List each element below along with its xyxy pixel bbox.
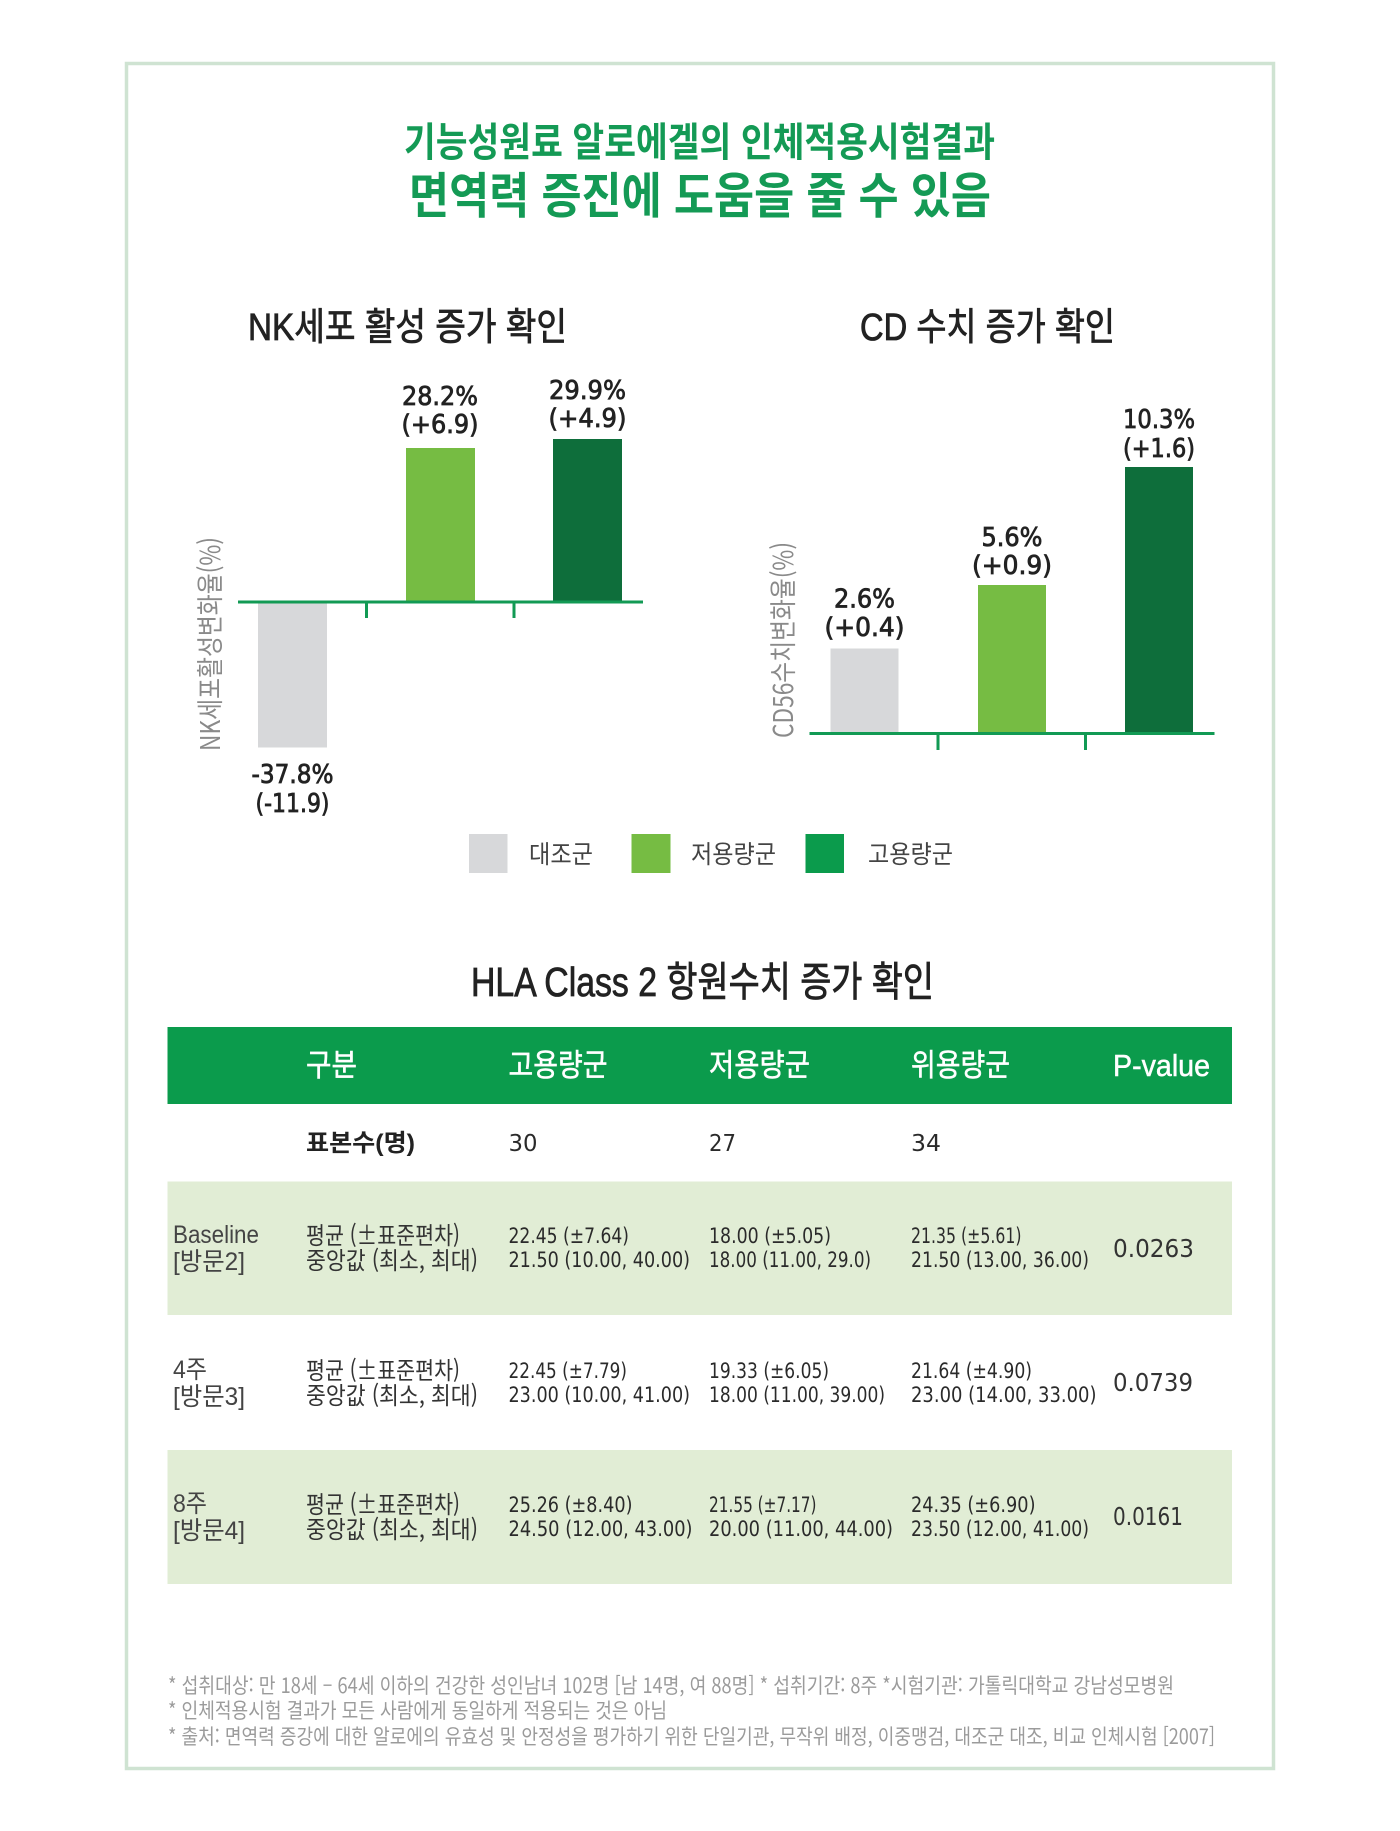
value: control: (-11.9) (256, 789, 330, 819)
title line 1: 기능성원료 알로에겔의 인체적용시험결과 (404, 121, 995, 165)
table header: P-value (1113, 1048, 1210, 1083)
value: low dose (972, 523, 1052, 581)
legend label: low dose: 저용량군 (691, 835, 776, 871)
bar: low dose (978, 585, 1046, 734)
panel frame (126, 64, 1274, 1768)
table row: week 4: 0.0739 (1113, 1368, 1193, 1397)
legend swatch: high dose (806, 834, 844, 873)
table row: sample size (306, 1130, 941, 1157)
table row: week 4: 23.00 (10.00, 41.00) (508, 1383, 690, 1407)
table row: baseline: 22.45 (±7.64) (508, 1224, 629, 1248)
value: low dose: (+0.9) (972, 551, 1052, 581)
legend label: control: 대조군 (529, 835, 593, 871)
panel: CD chart (762, 307, 1214, 750)
heading: CD chart: CD 수치 증가 확인 (860, 307, 1115, 349)
table row: baseline (168, 1182, 1232, 1315)
value: high dose: (+1.6) (1123, 434, 1195, 464)
title (404, 121, 995, 224)
table row: baseline: 21.50 (13.00, 36.00) (911, 1248, 1089, 1272)
table row: baseline: [방문2] (173, 1248, 245, 1276)
bar: high dose (1125, 467, 1193, 734)
table row: sample size: 27 (709, 1131, 736, 1157)
heading: HLA table: HLA Class 2 항원수치 증가 확인 (471, 959, 934, 1005)
value: high dose: 10.3% (1123, 405, 1195, 435)
bar: low dose (406, 448, 475, 602)
table row: baseline: 평균 (±표준편차) (306, 1216, 460, 1251)
table row: baseline: 0.0263 (1113, 1234, 1194, 1263)
table row: baseline: Baseline (173, 1221, 259, 1249)
legend (469, 834, 953, 873)
value: control (252, 760, 334, 819)
table row: baseline: 18.00 (11.00, 29.0) (709, 1248, 871, 1272)
value: high dose: (+4.9) (548, 404, 626, 434)
axis: CD (810, 732, 1214, 750)
value: low dose: 5.6% (982, 523, 1042, 553)
table header: 고용량군 (508, 1048, 608, 1083)
table row: sample size: 34 (911, 1131, 941, 1157)
heading: NK chart: NK세포 활성 증가 확인 (248, 307, 567, 349)
table header (168, 1027, 1232, 1104)
table row: week 8: 8주 (173, 1490, 207, 1518)
axis: NK (238, 600, 643, 618)
table row: sample size: 표본수(명) (306, 1130, 415, 1157)
value: control: 2.6% (834, 584, 895, 614)
footnotes: * 인체적용시험 결과가 모든 사람에게 동일하게 적용되는 것은 아님 (168, 1695, 667, 1725)
table row: baseline: 21.50 (10.00, 40.00) (508, 1248, 690, 1272)
value: high dose (548, 376, 626, 434)
table header: 구분 (306, 1048, 357, 1083)
table row: week 4: 18.00 (11.00, 39.00) (709, 1383, 885, 1407)
table row: baseline: 중앙값 (최소, 최대) (306, 1241, 478, 1276)
table row: week 4: 4주 (173, 1356, 207, 1384)
value: control: (+0.4) (824, 613, 904, 643)
table row: week 8: 평균 (±표준편차) (306, 1485, 460, 1520)
table row: week 4: 23.00 (14.00, 33.00) (911, 1383, 1096, 1407)
table row: week 8: 23.50 (12.00, 41.00) (911, 1517, 1089, 1541)
table row: week 8: 24.35 (±6.90) (911, 1493, 1036, 1517)
table row: week 4: 중앙값 (최소, 최대) (306, 1376, 478, 1411)
table row: week 8: [방문4] (173, 1517, 245, 1545)
value: high dose: 29.9% (549, 376, 626, 406)
value: control: -37.8% (252, 760, 334, 790)
table row: week 8: 20.00 (11.00, 44.00) (709, 1517, 893, 1541)
legend label: high dose: 고용량군 (868, 835, 953, 871)
table header: 저용량군 (709, 1048, 810, 1083)
y axis label: NK: NK세포활성변화율(%) (189, 537, 228, 751)
panel: NK cell chart (189, 307, 643, 819)
table (168, 1027, 1232, 1584)
footnotes: * 섭취대상: 만 18세 – 64세 이하의 건강한 성인남녀 102명 [남 14명, 여 88명] * 섭취기간: 8주 *시험기관: 가톨릭대학교 강남성모병원 (168, 1670, 1174, 1700)
table row: week 4: 19.33 (±6.05) (709, 1359, 829, 1383)
table row: week 4 (173, 1351, 1193, 1411)
table row: week 4: 21.64 (±4.90) (911, 1359, 1032, 1383)
legend swatch: control (469, 834, 508, 873)
table row: week 8 (168, 1450, 1232, 1584)
table row: week 8: 중앙값 (최소, 최대) (306, 1510, 478, 1545)
value: high dose (1123, 405, 1195, 464)
table row: week 8: 25.26 (±8.40) (508, 1493, 632, 1517)
table header: 위용량군 (911, 1048, 1010, 1083)
bar: control (830, 648, 898, 734)
bar: high dose (553, 439, 622, 602)
table row: baseline: 21.35 (±5.61) (911, 1224, 1022, 1248)
table row: week 4: 평균 (±표준편차) (306, 1351, 460, 1386)
y axis label: CD56: CD56수치변화율(%) (762, 542, 801, 738)
value: control (824, 584, 904, 643)
table row: baseline: 18.00 (±5.05) (709, 1224, 831, 1248)
table row: week 8: 21.55 (±7.17) (709, 1493, 816, 1517)
footnotes (168, 1670, 1215, 1751)
table row: week 4: [방문3] (173, 1383, 245, 1411)
footnotes: * 출처: 면역력 증강에 대한 알로에의 유효성 및 안정성을 평가하기 위한 단일기관, 무작위 배정, 이중맹검, 대조군 대조, 비교 인체시험 [2007] (168, 1721, 1215, 1751)
value: low dose (402, 382, 478, 440)
bar: control (258, 602, 327, 748)
table row: sample size: 30 (508, 1131, 538, 1157)
table row: week 4: 22.45 (±7.79) (508, 1359, 627, 1383)
table row: week 8: 24.50 (12.00, 43.00) (508, 1517, 692, 1541)
table row: week 8: 0.0161 (1113, 1502, 1183, 1531)
title line 2: 면역력 증진에 도움을 줄 수 있음 (409, 170, 991, 224)
legend swatch: low dose (632, 834, 670, 873)
value: low dose: 28.2% (402, 382, 478, 412)
value: low dose: (+6.9) (402, 410, 478, 440)
